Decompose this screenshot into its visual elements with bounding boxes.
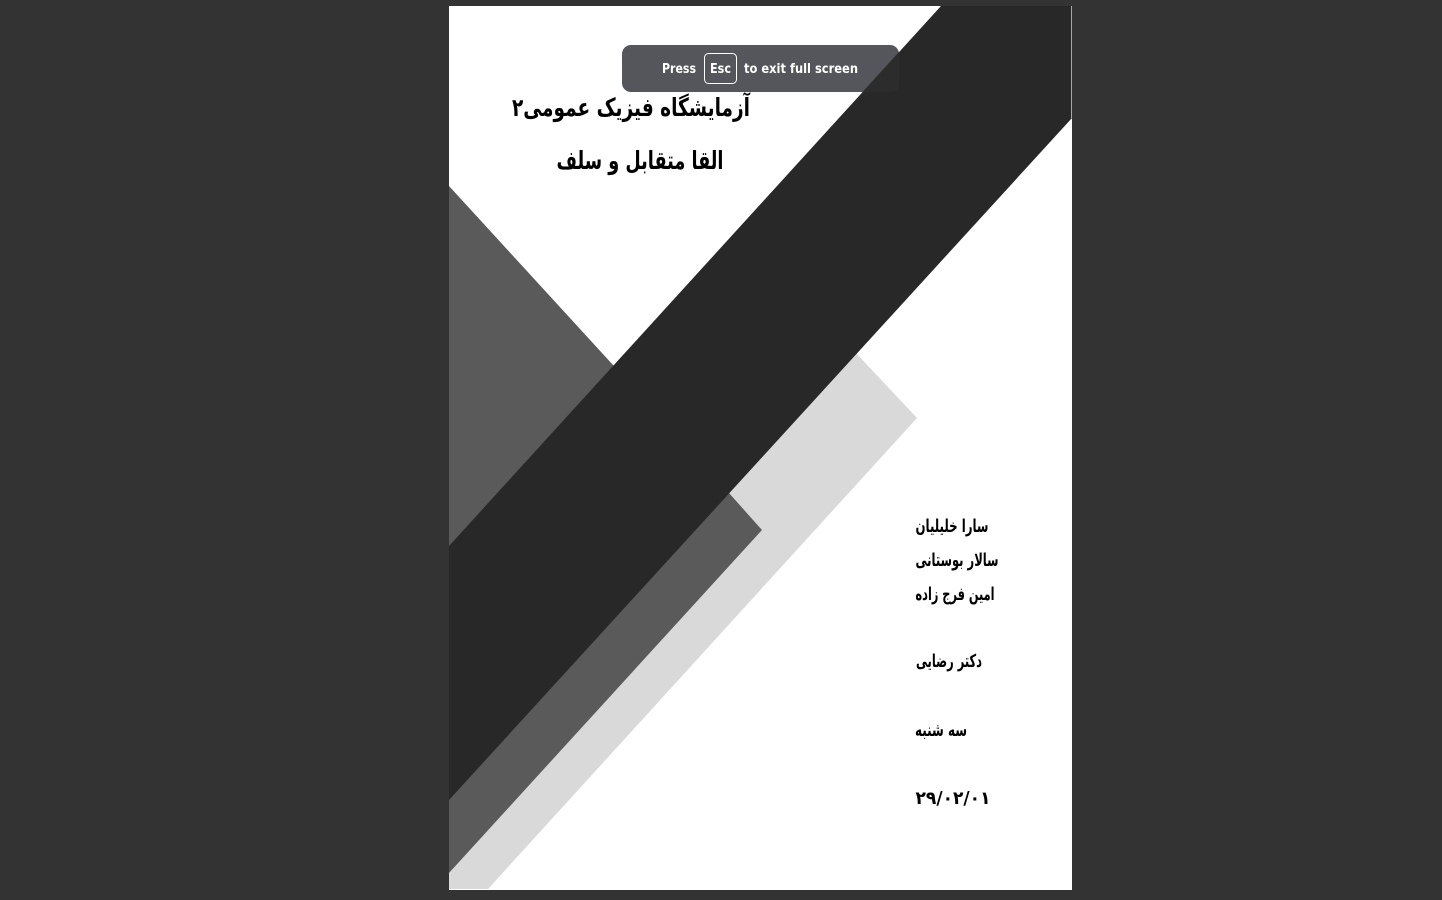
notice edge over dark band bbox=[863, 52, 899, 92]
day: سه شنبه bbox=[915, 720, 967, 741]
upper mid-gray triangle bbox=[449, 186, 640, 600]
light gray diagonal band bbox=[449, 353, 917, 889]
page background bbox=[449, 6, 1072, 890]
full screen notice text bbox=[662, 54, 858, 84]
author one: سارا خلیلیان bbox=[916, 516, 988, 537]
title line one: آزمایشگاه فیزیک عمومی۲ bbox=[512, 92, 751, 123]
dark diagonal band bbox=[449, 6, 1072, 800]
notice background bbox=[622, 45, 899, 92]
author three: امین فرج زاده bbox=[916, 584, 994, 605]
title line two: القا متقابل و سلف bbox=[556, 146, 724, 176]
instructor: دکتر رضایی bbox=[916, 651, 982, 672]
notice text press: Press bbox=[662, 62, 696, 77]
date: ۲۹/۰۲/۰۱ bbox=[916, 788, 990, 809]
authors and details bbox=[915, 516, 998, 809]
lower mid-gray band bbox=[449, 493, 762, 873]
title bbox=[512, 92, 751, 176]
esc key: Esc bbox=[710, 62, 731, 77]
page edge line bbox=[1071, 6, 1072, 118]
esc key bbox=[704, 54, 736, 84]
notice text exit: to exit full screen bbox=[744, 62, 858, 77]
author two: سالار بوستانی bbox=[916, 550, 998, 571]
